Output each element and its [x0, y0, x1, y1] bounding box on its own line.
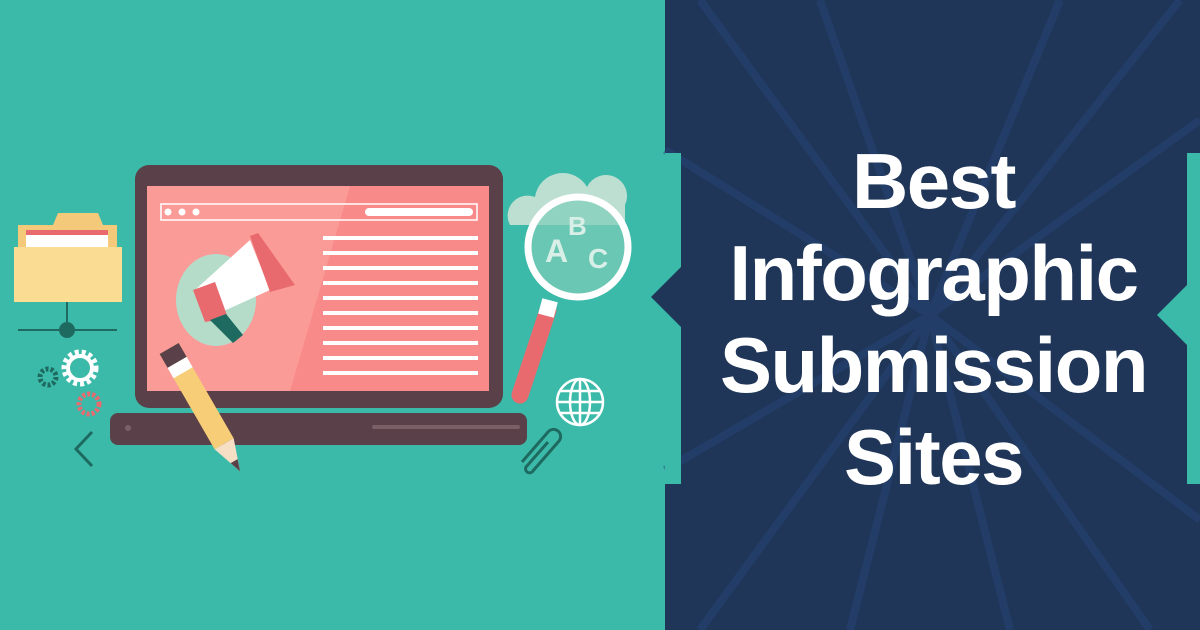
right dark panel [651, 0, 1200, 630]
title [720, 137, 1147, 501]
title: Submission [720, 321, 1147, 409]
title: Best [852, 137, 1015, 225]
icon: folder [14, 213, 122, 338]
icon: chevron [76, 432, 92, 466]
title: Infographic [729, 229, 1138, 317]
title: Sites [844, 413, 1023, 501]
laptop [110, 165, 527, 445]
icon: globe [557, 379, 603, 425]
icon: cloud [508, 173, 627, 225]
icon: paperclip [522, 429, 561, 473]
icon: magnifier: C [588, 243, 608, 274]
icon: gears [40, 352, 99, 414]
icon: pencil [160, 343, 250, 477]
icon: magnifier [520, 197, 628, 395]
icon: magnifier: B [568, 211, 587, 241]
icon: magnifier: A [545, 233, 568, 269]
